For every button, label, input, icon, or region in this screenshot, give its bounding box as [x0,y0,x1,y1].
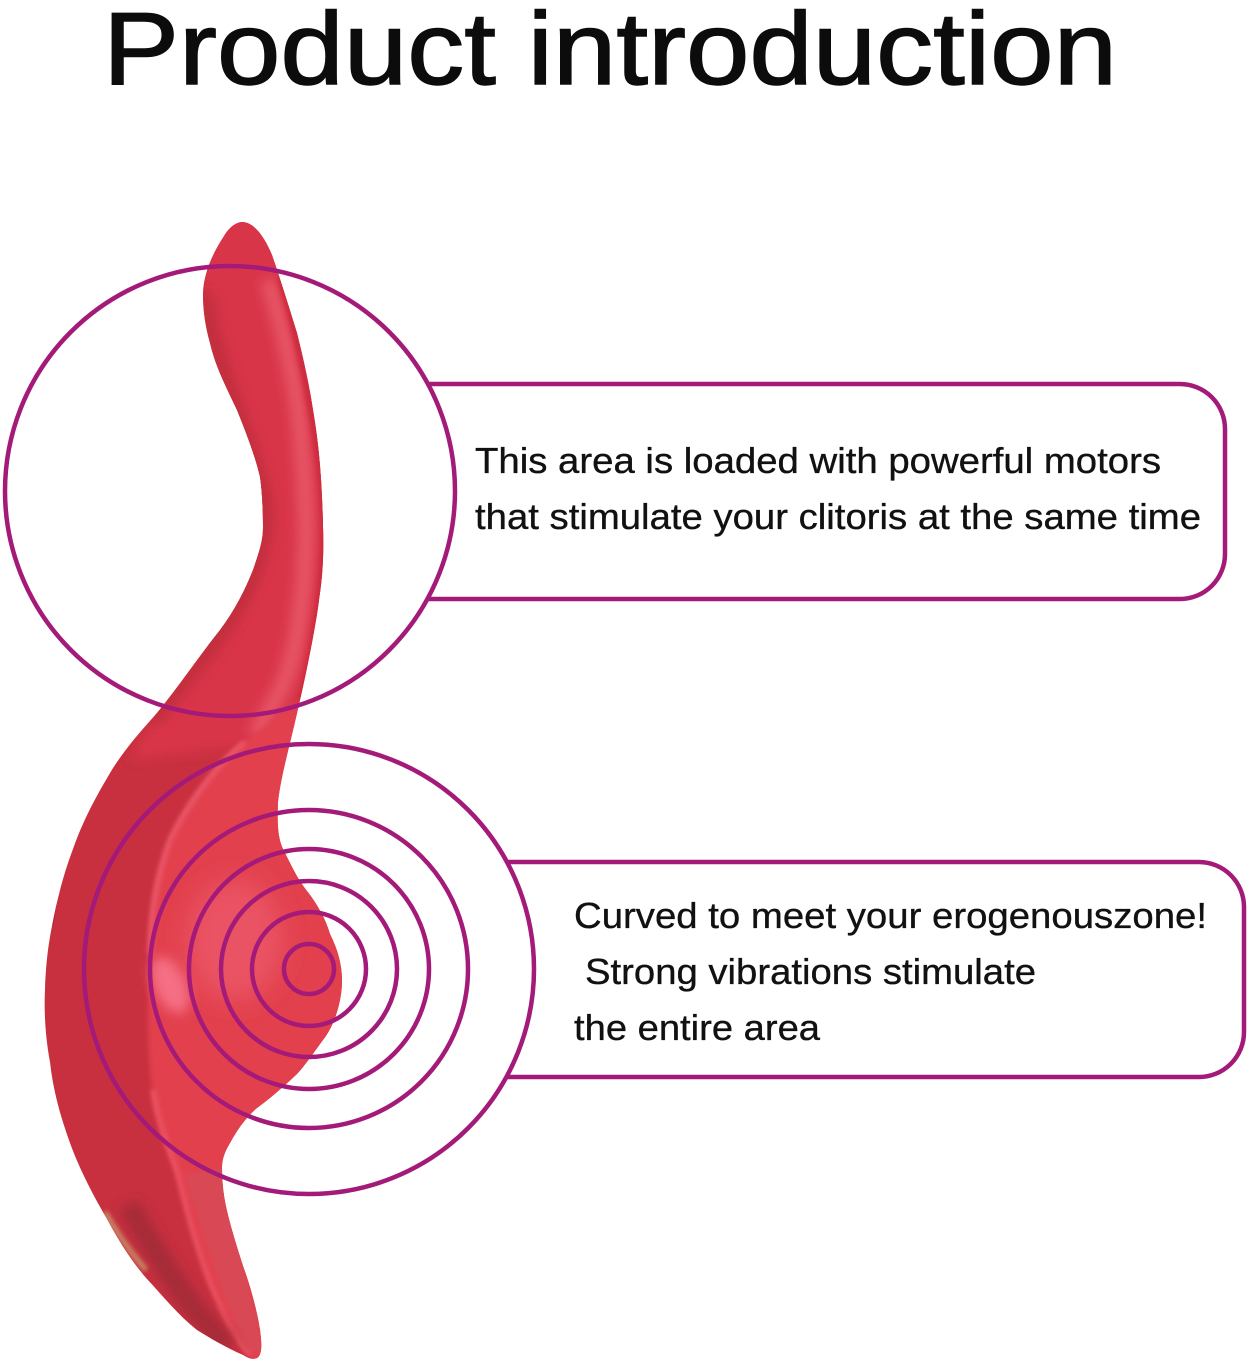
upper callout text: that stimulate your clitoris at the same time [475,496,1201,537]
gold trim [105,1212,146,1270]
lower callout text: Curved to meet your erogenouszone! [574,895,1207,936]
upper stem colour [136,222,324,758]
tail face [185,1168,264,1352]
crease highlight [150,742,245,955]
lower callout ring [84,744,534,1194]
product illustration [44,222,342,1359]
lower callout text: Strong vibrations stimulate [585,951,1036,992]
upper callout ring [5,266,455,716]
glossy spot [144,952,194,1018]
vibration rings [150,810,468,1128]
upper stem left shade [150,293,263,720]
lower callout text [574,895,1207,1048]
upper stem right rim [280,277,324,713]
front face of lower body [147,700,342,1359]
upper callout text: This area is loaded with powerful motors [475,440,1161,481]
lower callout box [507,862,1244,1077]
lower callout text: the entire area [574,1007,821,1048]
upper callout text [475,440,1201,537]
upper stem highlight [255,280,306,735]
base body colour [44,222,342,1359]
upper callout box [428,384,1225,599]
cup highlight [187,880,283,1000]
dark tail band [128,1205,228,1347]
lower crease highlight [153,1090,250,1355]
button marks [52,905,56,926]
